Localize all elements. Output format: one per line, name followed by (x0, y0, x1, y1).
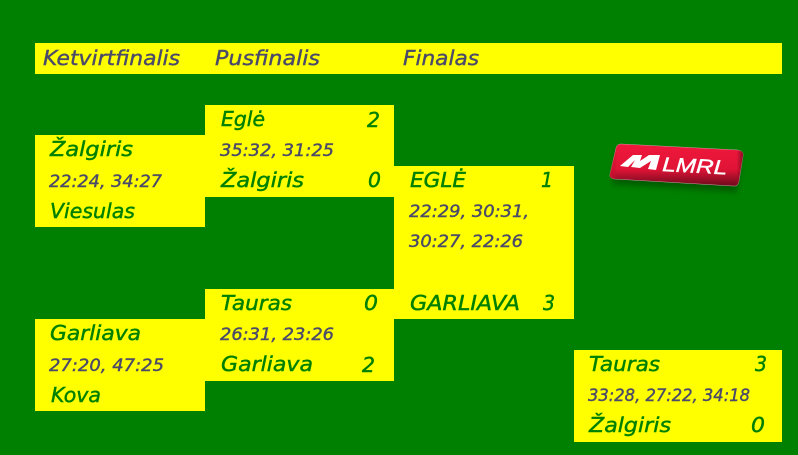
panel: final: 22:29, 30:31, (409, 202, 529, 221)
panel: quarterfinal 1: 22:24, 34:27 (49, 172, 163, 191)
icon: LMRL logo: LMRL (662, 154, 728, 179)
panel: quarterfinal 2: 27:20, 47:25 (49, 356, 164, 375)
panel: quarterfinal 2: Garliava (50, 321, 141, 345)
panel: semifinal 2 (205, 289, 394, 381)
panel: third place: Žalgiris (588, 413, 671, 437)
panel: semifinal 1: 0 (368, 168, 381, 192)
header bar: Finalas (403, 46, 479, 70)
panel: semifinal 2: Tauras (221, 291, 292, 315)
panel: semifinal 1: Eglė (221, 107, 265, 131)
panel: final: EGLĖ (410, 168, 466, 192)
panel: quarterfinal 1 (35, 135, 205, 227)
header bar (35, 43, 782, 74)
icon: LMRL logo (610, 144, 743, 192)
panel: semifinal 1: 2 (367, 108, 380, 132)
panel: semifinal 1 (205, 105, 394, 197)
panel: semifinal 2: Garliava (221, 352, 313, 376)
panel: quarterfinal 2: Kova (51, 383, 101, 407)
panel: semifinal 1: Žalgiris (220, 168, 304, 192)
panel: third place (574, 350, 782, 442)
panel: semifinal 1: 35:32, 31:25 (220, 141, 334, 160)
panel: third place: 33:28, 27:22, 34:18 (588, 386, 750, 405)
panel: final: 30:27, 22:26 (409, 232, 523, 251)
panel: semifinal 2: 2 (362, 353, 375, 377)
panel: third place: 0 (751, 413, 765, 437)
panel: final (394, 166, 574, 319)
panel: semifinal 2: 0 (364, 291, 378, 315)
panel: final: 3 (543, 291, 555, 315)
panel: final: 1 (541, 168, 553, 192)
panel: quarterfinal 1: Viesulas (50, 199, 135, 223)
panel: third place: Tauras (589, 352, 660, 376)
panel: third place: 3 (755, 352, 767, 376)
panel: final: GARLIAVA (410, 291, 520, 315)
header bar: Pusfinalis (215, 46, 320, 70)
panel: quarterfinal 1: Žalgiris (49, 137, 133, 161)
header bar: Ketvirtfinalis (43, 46, 180, 70)
panel: semifinal 2: 26:31, 23:26 (220, 325, 334, 344)
panel: quarterfinal 2 (35, 319, 205, 411)
